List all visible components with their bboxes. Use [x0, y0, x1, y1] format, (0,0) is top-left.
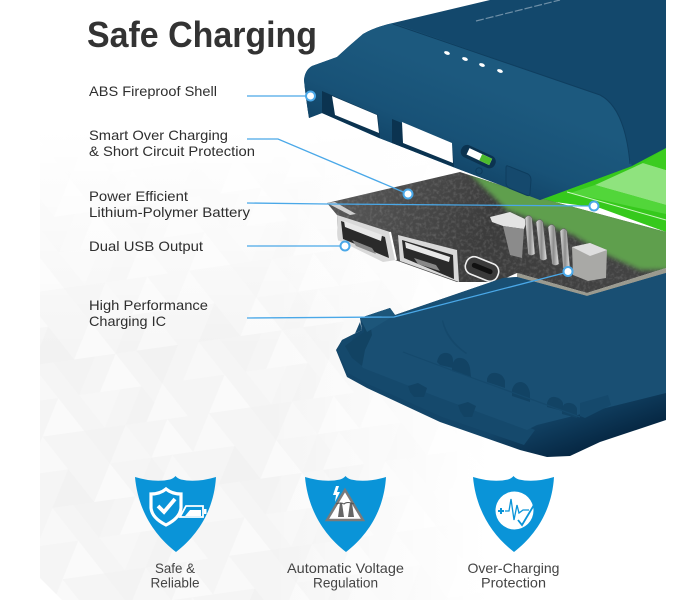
- badge: over-charging protection: [468, 476, 560, 590]
- circuit board: [327, 172, 672, 298]
- caption: safe and reliable: Safe &: [155, 560, 196, 576]
- caption: over-charging protection: Over-Charging: [468, 560, 560, 576]
- icon: pulse circle with check: [496, 492, 534, 530]
- USB-A port left: [337, 215, 396, 262]
- LED indicators: [444, 50, 503, 74]
- top case shell: [304, 0, 666, 200]
- callout dots: [306, 92, 598, 276]
- badge: automatic voltage regulation: [287, 476, 404, 590]
- label: ABS shell: ABS Fireproof Shell: [89, 83, 217, 99]
- label: charging IC: High Performance: [89, 297, 208, 313]
- caption: automatic voltage regulation: [287, 560, 404, 590]
- label: charging IC: Charging IC: [89, 313, 166, 329]
- label: protection: [89, 127, 255, 159]
- label: protection: Smart Over Charging: [89, 127, 228, 143]
- badge: safe and reliable: [135, 476, 216, 590]
- micro USB port: [459, 143, 498, 170]
- green tinted board area: [468, 172, 672, 270]
- label: battery: [89, 188, 250, 220]
- caption: over-charging protection: Protection: [481, 574, 546, 590]
- label: battery: Lithium-Polymer Battery: [89, 204, 250, 220]
- background triangle pattern: [40, 130, 500, 600]
- lower case shell: [336, 273, 666, 457]
- leader lines: [247, 96, 594, 318]
- shell outer body: [304, 0, 666, 200]
- USB-A port right: [398, 235, 459, 282]
- metal contact pins: [490, 212, 607, 281]
- green battery cell: [540, 146, 666, 232]
- label: USB output: Dual USB Output: [89, 238, 203, 254]
- caption: over-charging protection: [468, 560, 560, 590]
- icon: pylon warning triangle: [327, 486, 363, 520]
- label: charging IC: [89, 297, 208, 329]
- right USB window: [392, 119, 454, 167]
- title: Safe Charging: [87, 14, 317, 55]
- inner ribs and latches: [408, 320, 611, 418]
- caption: safe and reliable: [150, 560, 200, 590]
- callout labels: [89, 83, 255, 329]
- caption: automatic voltage regulation: Automatic Voltage: [287, 560, 404, 576]
- USB-C port: [463, 254, 501, 284]
- power icon: [476, 168, 482, 174]
- caption: safe and reliable: Reliable: [150, 574, 200, 590]
- caption: automatic voltage regulation: Regulation: [313, 574, 378, 590]
- side button: [506, 166, 531, 196]
- icon: shield with check and battery: [151, 489, 206, 525]
- left USB window: [322, 91, 380, 138]
- label: protection: & Short Circuit Protection: [89, 143, 255, 159]
- shell front face: [304, 23, 632, 200]
- label: battery: Power Efficient: [89, 188, 188, 204]
